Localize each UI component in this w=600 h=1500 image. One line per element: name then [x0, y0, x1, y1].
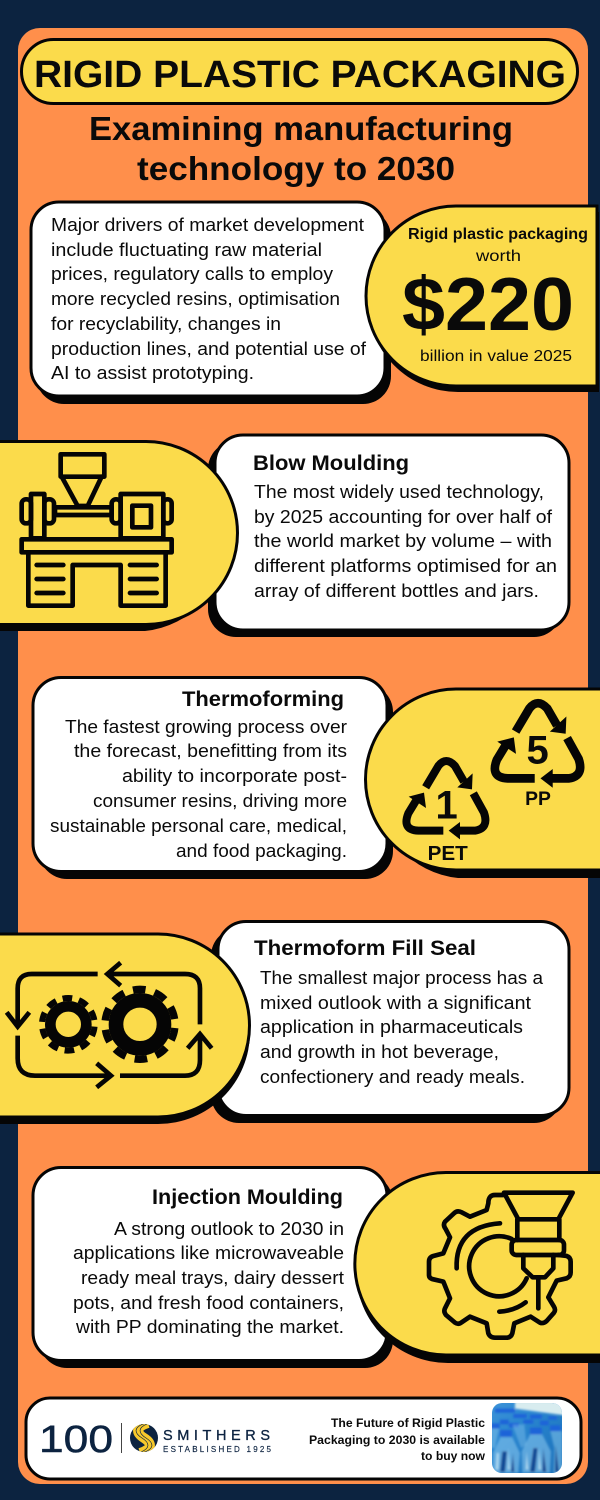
- text block: blow moulding: by 2025 accounting for over half of: [254, 506, 553, 527]
- icon: moulding machine: [22, 454, 172, 606]
- text block: thermoforming: consumer resins, driving more: [93, 790, 347, 811]
- heading: thermoform fill seal: Thermoform Fill Seal: [254, 937, 476, 960]
- text block: market drivers: production lines, and potential use of: [51, 338, 367, 359]
- callout: market value: worth: [475, 248, 521, 265]
- title: RIGID PLASTIC PACKAGING: [34, 54, 566, 96]
- panel: thermoform fill seal: [211, 922, 569, 1123]
- text block: thermoforming: ability to incorporate post-: [122, 765, 347, 786]
- title: [22, 40, 578, 104]
- text block: market drivers: Major drivers of market development: [51, 214, 364, 235]
- text block: thermoforming: and food packaging.: [176, 840, 347, 861]
- icon: recycling code 5: [495, 703, 580, 810]
- icon: recycling code 5: PP: [525, 789, 551, 810]
- panel: thermoforming: [33, 678, 393, 879]
- text block: thermoform fill seal: mixed outlook with a significant: [260, 992, 531, 1013]
- text block: market drivers: AI to assist prototyping.: [51, 362, 254, 383]
- panel: blow moulding: [208, 435, 569, 637]
- text block: blow moulding: different platforms optimised for an: [254, 555, 557, 576]
- text block: market drivers: prices, regulatory calls to employ: [51, 263, 334, 284]
- panel: process icon: [0, 934, 250, 1124]
- text block: thermoforming: the forecast, benefitting from its: [74, 740, 347, 761]
- logo: Smithers 100 years: ESTABLISHED 1925: [163, 1445, 272, 1454]
- text block: injection moulding: pots, and fresh food containers,: [73, 1292, 344, 1313]
- subtitle: Examining manufacturing: [89, 110, 513, 147]
- panel: blow moulding icon: [0, 442, 237, 631]
- icon: gears and arrows: [7, 963, 212, 1087]
- icon: recycling code 1: [406, 761, 485, 865]
- logo: Smithers 100 years: [42, 1423, 271, 1453]
- text block: report availability: The Future of Rigid Plastic: [331, 1416, 485, 1430]
- text block: blow moulding: the world market by volume – with: [254, 530, 552, 551]
- text block: blow moulding: array of different bottles and jars.: [254, 580, 539, 601]
- text block: injection moulding: A strong outlook to 2030 in: [114, 1218, 344, 1239]
- logo: Smithers 100 years: 100: [39, 1419, 113, 1461]
- text block: thermoforming: [50, 716, 347, 861]
- text block: injection moulding: ready meal trays, dairy dessert: [81, 1267, 344, 1288]
- text block: blow moulding: [254, 481, 557, 601]
- panel: footer: [26, 1398, 581, 1479]
- heading: injection moulding: Injection Moulding: [152, 1186, 343, 1209]
- text block: thermoform fill seal: The smallest major process has a: [260, 967, 544, 988]
- callout: market value: Rigid plastic packaging: [408, 226, 588, 243]
- text block: thermoform fill seal: confectionery and ready meals.: [260, 1066, 525, 1087]
- text block: thermoform fill seal: and growth in hot beverage,: [260, 1041, 499, 1062]
- text block: market drivers: more recycled resins, optimisation: [51, 288, 340, 309]
- subtitle: technology to 2030: [137, 150, 455, 187]
- text block: injection moulding: [73, 1218, 344, 1337]
- text block: blow moulding: The most widely used technology,: [254, 481, 544, 502]
- callout: market value: billion in value 2025: [420, 348, 572, 365]
- panel: injection moulding: [33, 1168, 393, 1368]
- image: plastic bottles: [491, 1401, 565, 1473]
- text block: thermoforming: sustainable personal care, medical,: [50, 815, 347, 836]
- panel: market drivers: [31, 202, 391, 404]
- text block: injection moulding: applications like microwaveable: [73, 1242, 344, 1263]
- callout: market value: [366, 206, 599, 392]
- text block: injection moulding: with PP dominating the market.: [75, 1316, 344, 1337]
- text block: market drivers: for recyclability, changes in: [51, 313, 281, 334]
- text block: report availability: Packaging to 2030 is available: [309, 1433, 485, 1447]
- heading: thermoforming: Thermoforming: [182, 688, 344, 711]
- icon: recycling code 1: PET: [428, 842, 468, 865]
- heading: blow moulding: Blow Moulding: [253, 452, 409, 475]
- icon: recycling code 5: 5: [527, 728, 549, 772]
- panel: injection icon: [355, 1172, 600, 1363]
- text block: thermoforming: The fastest growing process over: [65, 716, 347, 737]
- text block: thermoform fill seal: application in pharmaceuticals: [260, 1016, 523, 1037]
- icon: gear and nozzle: [429, 1193, 573, 1338]
- subtitle: [89, 110, 513, 187]
- text block: market drivers: include fluctuating raw material: [51, 239, 322, 260]
- logo: Smithers 100 years: SMITHERS: [163, 1428, 270, 1444]
- text block: report availability: [309, 1416, 486, 1463]
- text block: report availability: to buy now: [421, 1449, 486, 1463]
- text block: thermoform fill seal: [260, 967, 544, 1087]
- icon: recycling code 1: 1: [436, 783, 458, 827]
- callout: market value: $220: [402, 262, 574, 346]
- text block: market drivers: [51, 214, 367, 383]
- panel: recycling codes: [366, 689, 600, 878]
